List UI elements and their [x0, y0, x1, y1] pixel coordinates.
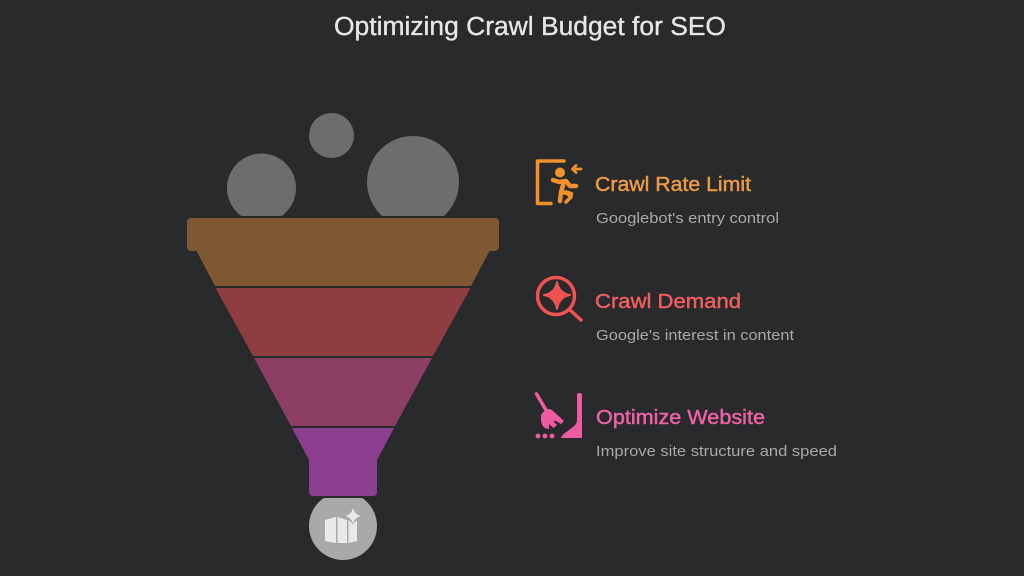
heading: Optimize Website: [596, 407, 765, 429]
description: Improve site structure and speed: [596, 443, 837, 460]
funnel illustration: [185, 113, 501, 560]
description: Googlebot's entry control: [596, 210, 779, 227]
heading: Crawl Rate Limit: [595, 174, 751, 196]
funnel rim: [187, 218, 499, 251]
funnel band: brown: [196, 250, 490, 286]
icon: map with sparkle: [325, 508, 361, 543]
circle: top ball: [309, 113, 354, 158]
funnel band: red: [216, 288, 470, 356]
icon: broom sweeping: [536, 393, 582, 438]
item: Crawl Demand: [538, 278, 795, 344]
output circle with map icon: [309, 492, 377, 560]
funnel band: mauve: [254, 358, 432, 426]
icon: magnifier with sparkle: [538, 278, 581, 320]
item: Crawl Rate Limit: [538, 161, 779, 227]
circle: right ball: [367, 136, 459, 228]
icon: running person through door: [538, 161, 581, 204]
funnel rim backing: [185, 216, 501, 252]
funnel band: purple spout: [292, 428, 394, 496]
funnel spout backing: [307, 460, 379, 498]
title: Optimizing Crawl Budget for SEO: [334, 13, 726, 41]
item: Optimize Website: [536, 393, 837, 460]
circle: left ball: [227, 154, 296, 222]
description: Google's interest in content: [596, 327, 795, 344]
heading: Crawl Demand: [595, 291, 741, 313]
